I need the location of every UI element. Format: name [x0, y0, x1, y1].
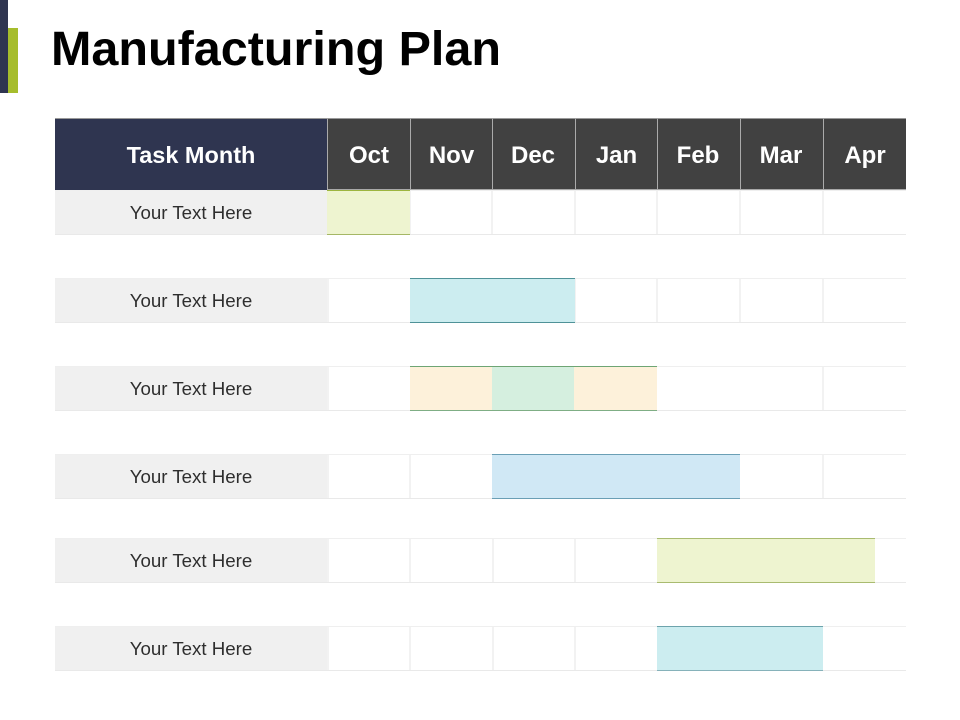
row 2	[55, 278, 906, 323]
row 6	[55, 626, 906, 671]
row 2 label: Your Text Here	[130, 290, 252, 311]
table header: Nov: Nov	[429, 142, 474, 169]
table header: Dec: Dec	[511, 142, 555, 169]
row 5 label: Your Text Here	[130, 550, 252, 571]
task bar: Dec to Feb	[492, 454, 740, 499]
table header: Nov	[410, 118, 492, 190]
task bar: Nov to Dec	[410, 278, 575, 323]
row 1	[55, 190, 906, 235]
row 4 label	[55, 455, 327, 498]
row 6 label: Your Text Here	[130, 638, 252, 659]
table header: Oct: Oct	[349, 142, 389, 169]
table header: Apr	[823, 118, 906, 190]
row 3 label	[55, 367, 327, 410]
row 1 label: Your Text Here	[130, 202, 252, 223]
table header: Jan	[575, 118, 657, 190]
accent bar: navy	[0, 0, 8, 93]
task bar: Feb to Mar	[657, 626, 823, 671]
table header: Mar: Mar	[760, 142, 802, 169]
table header: Dec	[492, 118, 575, 190]
row 6 label	[55, 627, 327, 670]
row 1 label	[55, 191, 327, 234]
row 3 label: Your Text Here	[130, 378, 252, 399]
row 3	[55, 366, 906, 411]
accent bar: green	[8, 28, 18, 93]
header bottom rule	[327, 189, 906, 191]
row 4	[55, 454, 906, 499]
row 5 label	[55, 539, 327, 582]
row 5	[55, 538, 906, 583]
table header: Mar	[740, 118, 823, 190]
table header: Task Month	[55, 118, 327, 190]
green segment: Dec	[492, 367, 574, 410]
table header: Feb	[657, 118, 740, 190]
table header: Feb: Feb	[677, 142, 719, 169]
task bar: Feb to mid-Apr	[657, 538, 875, 583]
table header: Task Month: Task Month	[127, 142, 255, 168]
row 4 label: Your Text Here	[130, 466, 252, 487]
row 2 label	[55, 279, 327, 322]
table header: Jan: Jan	[596, 142, 637, 169]
task bar: Oct	[327, 190, 410, 235]
table header: Apr: Apr	[844, 142, 886, 169]
table header: Oct	[327, 118, 410, 190]
task bar: Nov to Jan, segmented	[410, 366, 657, 411]
title: Manufacturing Plan	[51, 22, 501, 76]
